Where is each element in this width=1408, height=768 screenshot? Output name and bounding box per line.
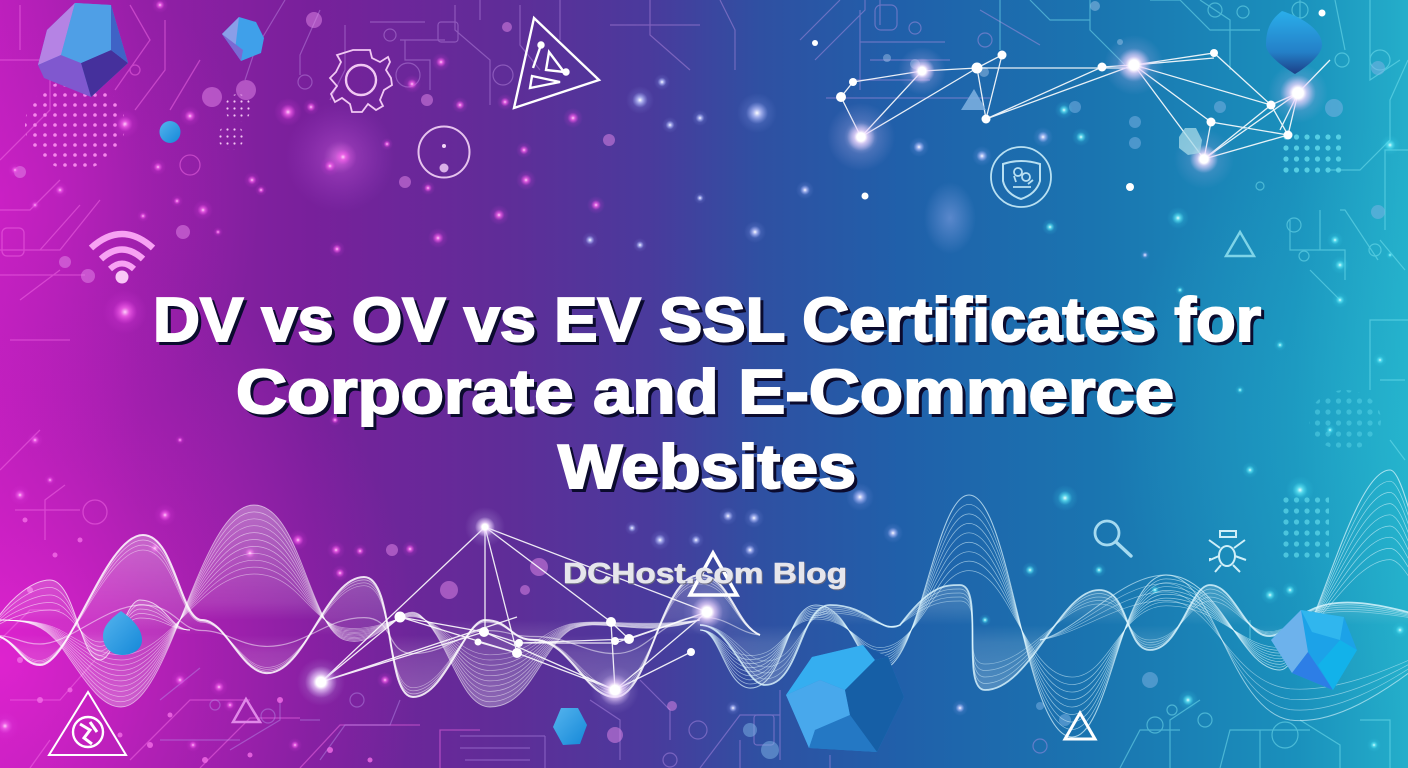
icon: gear xyxy=(330,50,392,112)
title: Corporate and E-Commerce xyxy=(236,358,1174,427)
wave ribbons: right xyxy=(700,470,1408,737)
icon: globe triangle xyxy=(49,692,126,755)
icon: bug xyxy=(1209,531,1246,572)
network: top right xyxy=(812,10,1330,200)
gem: top small xyxy=(222,17,264,61)
gem: right xyxy=(1271,610,1357,690)
circuit traces: top centre xyxy=(245,0,1040,105)
circuit traces: bottom centre xyxy=(160,668,1047,768)
gem: big bottom xyxy=(786,645,904,752)
gem: tiny blue xyxy=(160,121,180,143)
title: Websites xyxy=(558,433,856,502)
icon: wifi xyxy=(91,234,153,284)
subtitle: DCHost.com Blog xyxy=(563,558,847,590)
icon: magnifier xyxy=(1095,521,1131,556)
wave ribbons: left xyxy=(0,505,760,707)
gem: top left xyxy=(38,3,128,97)
icon: filled pale triangle xyxy=(961,89,986,110)
icon: shield badge xyxy=(991,147,1051,207)
icon: hollow circle xyxy=(418,126,470,178)
title xyxy=(153,286,1261,502)
icon: triangle near subtitle xyxy=(690,553,737,595)
gem: top right xyxy=(1266,11,1322,74)
glow particles: lilac and blue xyxy=(582,74,1408,752)
glow particles: magenta xyxy=(0,0,605,752)
circuit traces: left xyxy=(0,5,480,768)
icon: triangle with nested shapes xyxy=(514,18,599,108)
gem: bottom small xyxy=(553,708,587,745)
icon: outlined triangle right xyxy=(1226,232,1254,256)
icon: faint triangle xyxy=(233,699,260,722)
title: DV vs OV vs EV SSL Certificates for xyxy=(153,286,1261,355)
halftone dot clusters xyxy=(25,80,1381,561)
circuit traces: right xyxy=(1000,0,1408,768)
icon: white triangle bottom right xyxy=(1065,713,1095,739)
icon: pale hexagon xyxy=(1179,128,1202,155)
gem: left wave xyxy=(103,611,142,655)
network: bottom centre xyxy=(297,507,731,714)
